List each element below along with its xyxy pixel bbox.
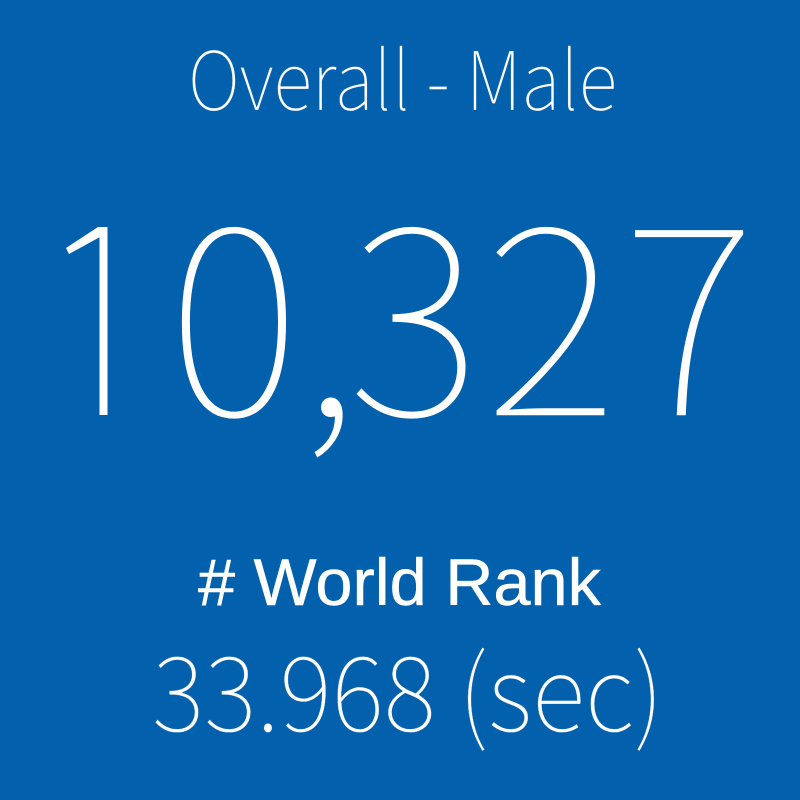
title: Overall - Male: Overall - Male bbox=[188, 17, 617, 134]
value: 33.968 (sec): 33.968 (sec) bbox=[152, 610, 664, 761]
label: # World Rank: # World Rank bbox=[198, 545, 602, 619]
big number: 10,327: 10,327 bbox=[33, 119, 756, 491]
